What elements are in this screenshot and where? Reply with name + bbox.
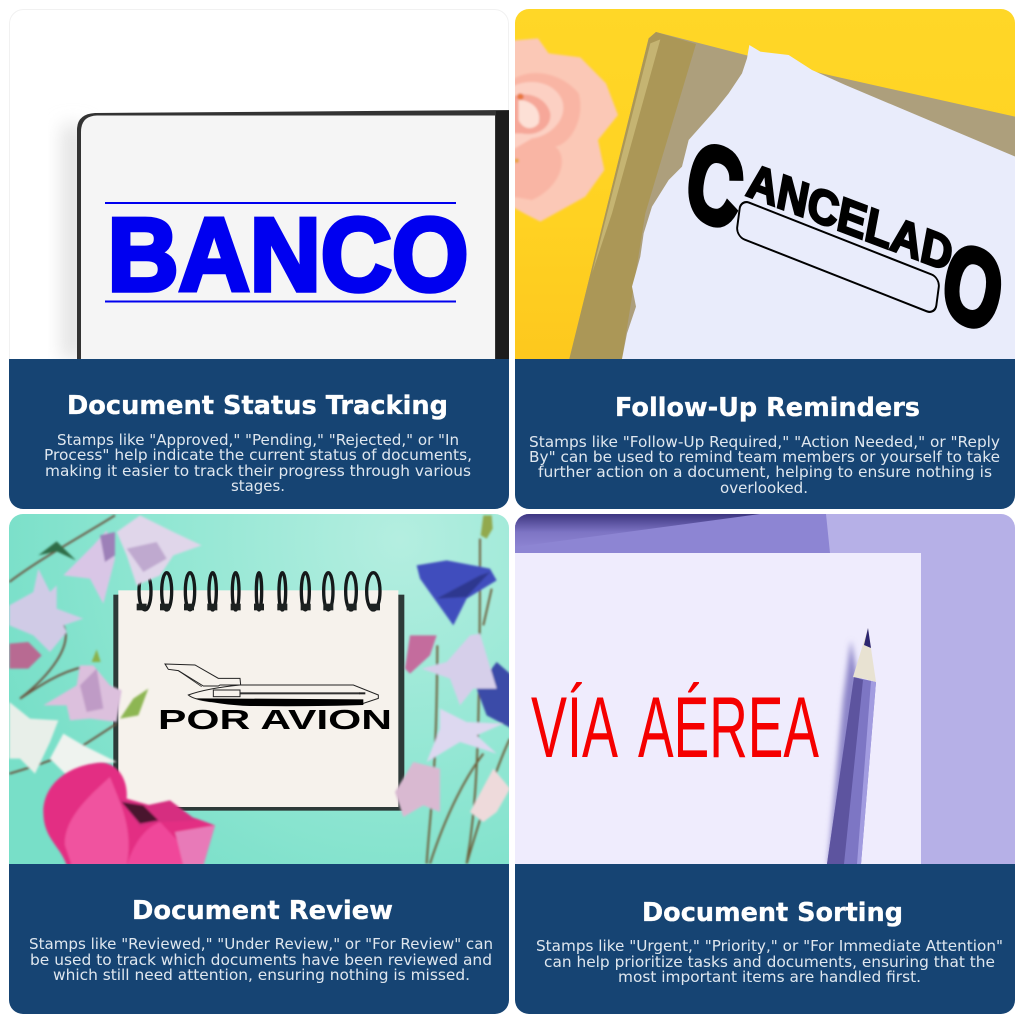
stamp: BANCO: BANCO <box>108 198 468 314</box>
text block: Process" help indicate the current status of documents, <box>44 446 472 464</box>
stamp: CANCELADO: ANCELAD <box>743 153 957 283</box>
text block <box>44 431 472 495</box>
text block: By" can be used to remind team members or yourself to take <box>529 448 1000 466</box>
caption band <box>515 864 1015 1014</box>
icon: pencil <box>827 628 876 864</box>
text block: Stamps like "Follow-Up Required," "Action Needed," or "Reply <box>529 433 1000 451</box>
icon: rose <box>512 38 618 222</box>
right flowers <box>395 515 512 864</box>
text block: can help prioritize tasks and documents, ensuring that the <box>544 953 995 971</box>
left flowers <box>9 515 202 779</box>
text block: be used to track which documents have been reviewed and <box>30 951 492 969</box>
panel: document status tracking <box>9 10 509 509</box>
text block: which still need attention, ensuring nothing is missed. <box>53 966 470 984</box>
stamp: CANCELADO: O <box>934 217 1012 357</box>
notebook <box>113 573 404 811</box>
paper <box>622 45 1015 359</box>
peony <box>43 763 215 865</box>
text block <box>536 937 1003 986</box>
board <box>569 32 1015 359</box>
spiral binding <box>139 573 380 610</box>
pencil shadow <box>828 640 858 864</box>
image: notebook with BANCO stamp <box>62 110 509 359</box>
heading: Document Review <box>132 896 393 926</box>
text block: Stamps like "Reviewed," "Under Review," or "For Review" can <box>29 935 493 953</box>
text block: further action on a document, helping to ensure nothing is <box>538 463 992 481</box>
panel: document sorting <box>515 514 1015 1014</box>
text block <box>29 935 493 984</box>
stamp: VÍA AÉREA: AÉREA <box>638 680 819 776</box>
stamp: CANCELADO <box>688 144 1002 329</box>
caption band <box>9 359 509 509</box>
caption band <box>515 359 1015 509</box>
text block: most important items are handled first. <box>618 968 921 986</box>
image: rose, board and torn paper <box>512 32 1015 359</box>
stamp: VÍA AÉREA <box>531 682 819 758</box>
text block <box>530 436 1000 493</box>
image: paper and pencil <box>515 514 921 864</box>
text block: making it easier to track their progress through various <box>45 462 471 480</box>
heading: Document Status Tracking <box>67 391 448 421</box>
stamp: airplane <box>165 664 378 706</box>
text block: overlooked. <box>720 479 808 497</box>
stamp: POR AVION: POR AVION <box>158 704 392 735</box>
caption band <box>9 864 509 1014</box>
image: notebook and flowers <box>9 515 512 865</box>
heading: Follow-Up Reminders <box>615 393 920 423</box>
text block: Stamps like "Approved," "Pending," "Rejected," or "In <box>57 431 459 449</box>
stamp: CANCELADO: C <box>678 116 752 254</box>
heading: Document Sorting <box>642 898 903 928</box>
text block: stages. <box>231 477 285 495</box>
text block: Stamps like "Urgent," "Priority," or "For Immediate Attention" <box>536 937 1003 955</box>
panel: document review <box>9 514 512 1014</box>
panel: follow-up reminders <box>512 9 1015 509</box>
stamp: VÍA AÉREA: VÍA <box>531 680 618 776</box>
